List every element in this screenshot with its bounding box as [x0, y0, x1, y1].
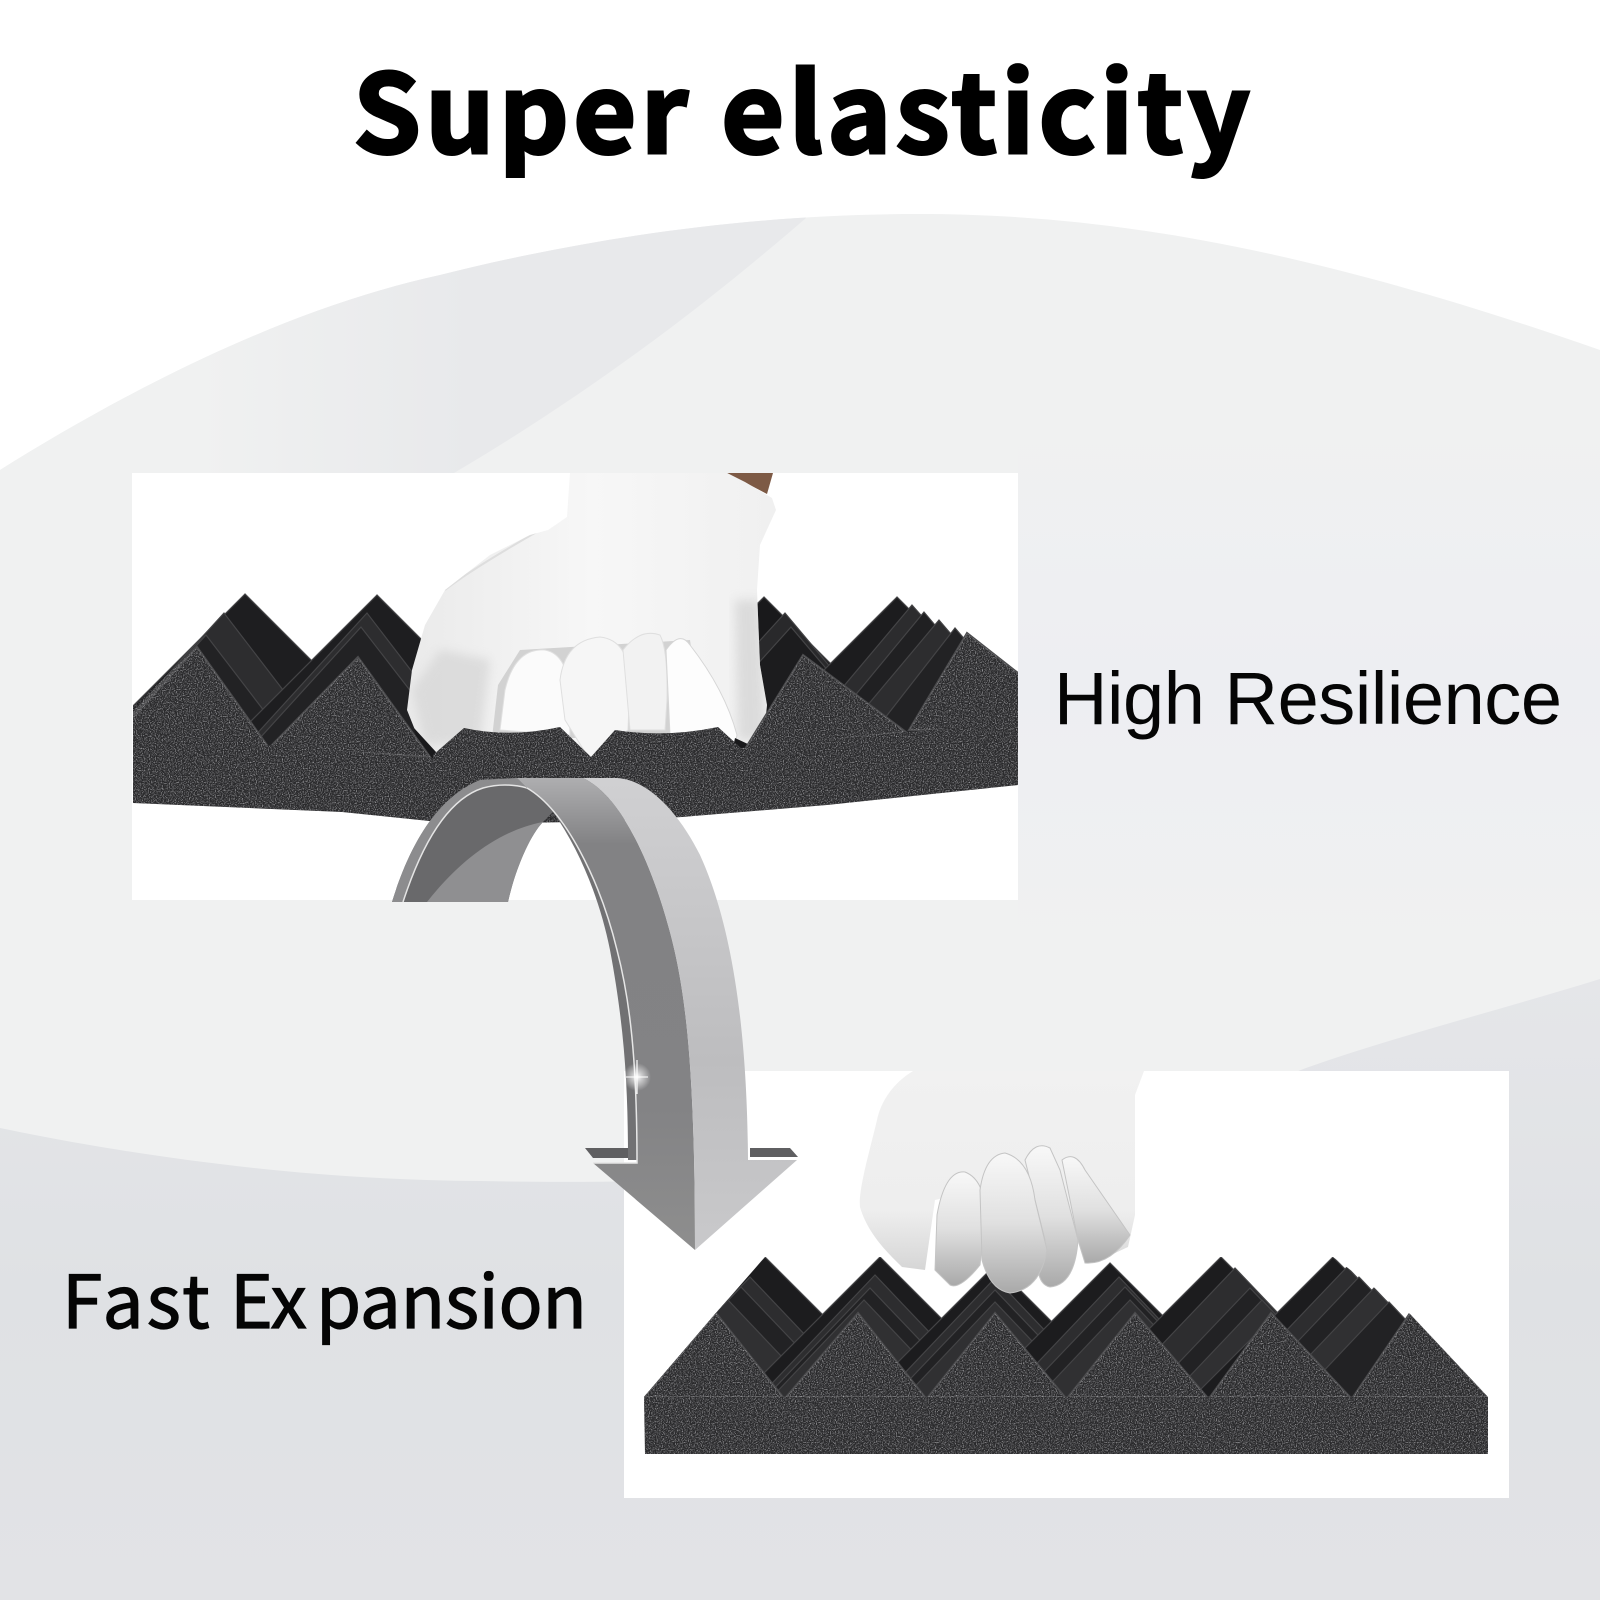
- panel: compressed foam with hand pressing: [89, 473, 1060, 900]
- label: High Resilience: High Resilience: [1054, 657, 1562, 740]
- icon: gloved hand pressing down: [407, 473, 776, 770]
- label: Fast Expansion: Fast: [62, 1244, 213, 1350]
- arrow light face: [583, 778, 797, 1250]
- arch back side: [392, 778, 553, 902]
- panel: recovered foam with hand released: [624, 1071, 1509, 1498]
- arrow flanges: [585, 1148, 637, 1158]
- foam back ribs: [644, 1257, 1406, 1397]
- label: Fast Expansion: Ex: [230, 1244, 307, 1350]
- arrow: curved silver arrow from top panel to bottom panel: [392, 778, 798, 1250]
- foam front pyramids and slab: [133, 632, 1018, 823]
- title: Super elasticity: [353, 28, 1250, 185]
- label: Fast Expansion: pansion: [316, 1244, 587, 1350]
- glove soft shading: [412, 530, 765, 745]
- arrow inner rim: [517, 778, 637, 1160]
- foam front pyramids and slab: [640, 1300, 1490, 1456]
- icon: gloved hand lifting: [860, 1071, 1144, 1293]
- arrow dark face: [517, 778, 695, 1250]
- arrow sparkle: [623, 1060, 651, 1094]
- foam back ribs: [133, 593, 964, 746]
